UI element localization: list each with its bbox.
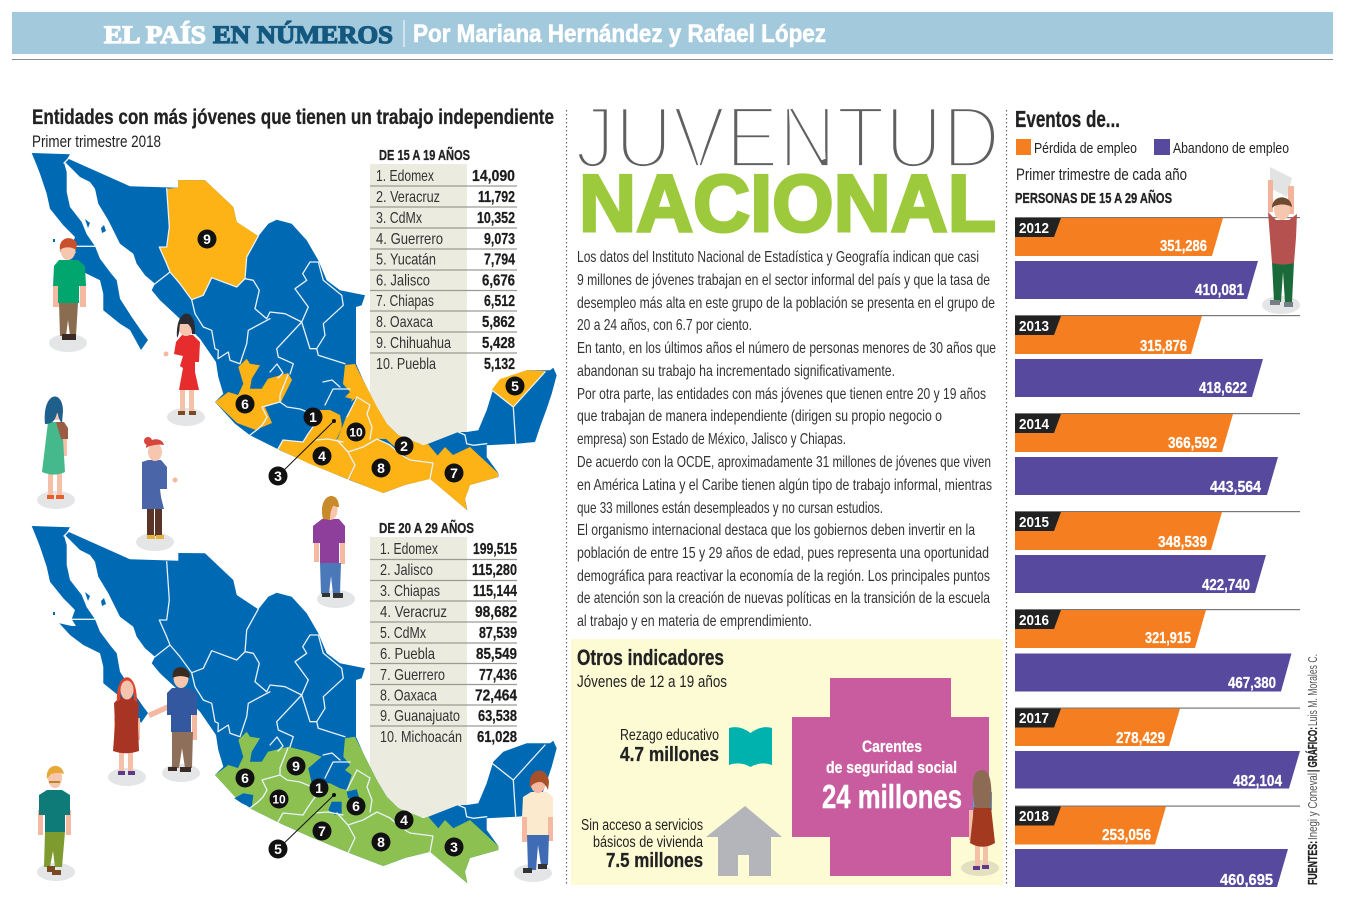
map rank badges: 5 <box>511 378 519 394</box>
table: de 20 a 29 años: 9. Guanajuato <box>380 708 460 725</box>
bars 2016: 321,915 <box>1145 630 1191 647</box>
map rank badges: 2 <box>400 438 408 454</box>
person: man blue shirt shaking hands <box>148 667 200 782</box>
panel heading: Otros indicadores <box>577 645 724 670</box>
map rank badges: 1 <box>309 409 317 425</box>
cross: carentes de seguridad social <box>792 678 989 876</box>
cross: carentes de seguridad social: de seguridad social <box>826 758 957 777</box>
bars 2014: 366,592 <box>1168 435 1217 452</box>
table: de 15 a 19 años: 9. Chihuahua <box>376 335 451 352</box>
table: de 15 a 19 años: 8. Oaxaca <box>376 314 433 331</box>
bars 2016: 467,380 <box>1228 675 1276 692</box>
table: de 20 a 29 años: 10. Michoacán <box>380 729 462 746</box>
table: de 20 a 29 años: 115,280 <box>472 562 517 579</box>
body text: desempleo más alta en este grupo de la población se presenta en el grupo de <box>577 295 995 312</box>
map rank badges: 8 <box>377 834 385 850</box>
byline: Por Mariana Hernández y Rafael López <box>413 20 826 48</box>
credits: | GRÁFICO: <box>1305 727 1320 772</box>
cross: carentes de seguridad social: 24 millones <box>822 778 962 815</box>
person: man purple shirt <box>313 496 355 608</box>
map rank badges: 4 <box>318 448 326 464</box>
map rank badges: 6 <box>241 396 249 412</box>
map: 20 a 29 años <box>32 526 557 883</box>
table: de 20 a 29 años: DE 20 A 29 AÑOS <box>379 519 474 537</box>
table: de 15 a 19 años: 10,352 <box>477 210 515 227</box>
table: de 15 a 19 años: 10. Puebla <box>376 356 436 373</box>
bars 2015: 348,539 <box>1158 534 1207 551</box>
table: de 15 a 19 años: 6,676 <box>482 272 515 290</box>
legend: Abandono de empleo <box>1173 140 1289 157</box>
bars 2017: 2017 <box>1019 710 1049 727</box>
table: de 20 a 29 años: 199,515 <box>473 541 517 558</box>
table: de 15 a 19 años: DE 15 A 19 AÑOS <box>379 146 470 164</box>
person: man cream shirt <box>514 771 553 882</box>
icon: house <box>706 806 782 876</box>
bars 2014: 443,564 <box>1210 479 1261 496</box>
map rank badges: 5 <box>274 841 282 857</box>
bars 2018: 253,056 <box>1102 827 1151 844</box>
bars 2018: 460,695 <box>1220 872 1273 889</box>
table: de 15 a 19 años <box>370 146 517 373</box>
map rank badges: 9 <box>292 758 300 774</box>
table: de 20 a 29 años: 7. Guerrero <box>380 667 445 684</box>
body text: que 33 millones están desempleados y no cursan estudios. <box>577 500 883 517</box>
body text: Los datos del Instituto Nacional de Estadística y Geografía indican que casi <box>577 249 979 266</box>
body text: en América Latina y el Caribe tienen algún tipo de trabajo informal, mientras <box>577 477 992 494</box>
heading: eventos de: Eventos de... <box>1015 106 1120 132</box>
body text: al trabajo y en materia de emprendimiento. <box>577 613 812 630</box>
indicator: vivienda: 7.5 millones <box>606 850 703 872</box>
person: man holding paper <box>1262 167 1300 314</box>
title: nacional: NACIONAL <box>579 159 996 249</box>
title: juventud: JUVENTUD <box>575 88 1000 186</box>
table: de 20 a 29 años: 8. Oaxaca <box>380 688 437 704</box>
bars 2012 <box>1015 217 1300 299</box>
table: de 20 a 29 años: 61,028 <box>477 729 517 746</box>
indicator: vivienda: básicos de vivienda <box>593 834 703 851</box>
body text: empresa) son Estado de México, Jalisco y Chiapas. <box>577 431 846 448</box>
table: de 20 a 29 años: 63,538 <box>478 708 517 725</box>
table: de 15 a 19 años: 2. Veracruz <box>376 189 440 206</box>
table: de 15 a 19 años: 6,512 <box>484 293 515 310</box>
bars 2016: 2016 <box>1019 612 1049 629</box>
table: de 20 a 29 años: 85,549 <box>476 646 517 663</box>
table: de 20 a 29 años: 2. Jalisco <box>380 562 433 579</box>
body text: En tanto, en los últimos años el número de personas menores de 30 años que <box>577 340 996 357</box>
body text: de atención son la creación de nuevas políticas en la transición de la escuela <box>577 590 990 607</box>
table: de 15 a 19 años: 5,862 <box>482 314 515 331</box>
table: de 20 a 29 años: 1. Edomex <box>380 541 438 558</box>
map rank badges: 6 <box>241 770 249 786</box>
map rank badges: 7 <box>318 823 326 839</box>
table: de 20 a 29 años: 4. Veracruz <box>380 604 447 621</box>
body text <box>577 249 996 630</box>
indicator: rezago educativo: 4.7 millones <box>620 744 719 766</box>
bars 2012: 351,286 <box>1160 238 1207 255</box>
body text: El organismo internacional destaca que los gobiernos deben invertir en la <box>577 522 975 539</box>
legend: Pérdida de empleo <box>1034 140 1137 157</box>
bars 2012: 2012 <box>1019 220 1049 237</box>
bars 2017: 482,104 <box>1233 773 1282 790</box>
table: de 15 a 19 años: 6. Jalisco <box>376 272 430 290</box>
table: de 20 a 29 años: 5. CdMx <box>380 625 426 642</box>
map rank badges: 9 <box>203 231 211 247</box>
table: de 20 a 29 años: 87,539 <box>479 625 517 642</box>
section name: EL PAÍS <box>104 21 206 49</box>
indicator: rezago educativo <box>620 727 719 766</box>
bars 2014: 2014 <box>1019 416 1050 433</box>
credits: Inegi y Coneval <box>1306 773 1320 840</box>
map rank badges: 4 <box>400 812 408 828</box>
person: woman red dress <box>164 313 205 426</box>
indicator: rezago educativo: Rezago educativo <box>620 727 719 744</box>
table: de 15 a 19 años: 11,792 <box>478 189 515 206</box>
bars 2015 <box>1015 511 1300 594</box>
map rank badges <box>236 756 464 858</box>
table background 15 a 19 <box>370 164 467 444</box>
map rank badges <box>198 230 524 486</box>
map rank badges: 3 <box>274 468 282 484</box>
table: de 20 a 29 años: 3. Chiapas <box>380 583 440 600</box>
map rank badges: 10 <box>349 426 363 440</box>
bars 2015: 2015 <box>1019 514 1049 531</box>
table: de 20 a 29 años: 6. Puebla <box>380 646 435 663</box>
CdMx leader line <box>278 421 334 476</box>
map rank badges: 1 <box>315 780 323 796</box>
body text: Por otra parte, las entidades con más jóvenes que tienen entre 20 y 19 años <box>577 386 986 403</box>
body text: abandonan su trabajo ha incrementado significativamente. <box>577 363 895 380</box>
table: de 20 a 29 años: 115,144 <box>473 583 517 600</box>
credits <box>1305 654 1320 885</box>
table background 20 a 29 <box>370 537 467 817</box>
bars 2015: 422,740 <box>1202 577 1250 594</box>
bars 2013: 315,876 <box>1140 338 1187 355</box>
table: de 15 a 19 años: 7,794 <box>484 252 515 268</box>
icon: book <box>729 727 772 767</box>
bars 2014 <box>1015 413 1300 496</box>
body text: demográfica para reactivar la economía de la región. Los principales puntos <box>577 568 990 585</box>
table: de 15 a 19 años: 9,073 <box>484 231 515 248</box>
map rank badges: 7 <box>450 465 458 481</box>
CdMx leader line <box>278 795 334 849</box>
table: de 15 a 19 años: 14,090 <box>472 168 515 185</box>
subheading: trimestre: Primer trimestre 2018 <box>32 132 161 151</box>
cross: carentes de seguridad social: Carentes <box>862 737 922 756</box>
map: 15 a 19 años <box>32 153 557 510</box>
table: de 20 a 29 años: 77,436 <box>479 667 517 684</box>
table: de 15 a 19 años: 5,428 <box>482 335 515 352</box>
table: de 15 a 19 años: 4. Guerrero <box>376 231 443 248</box>
panel: otros indicadores <box>571 639 1003 885</box>
map rank badges: 10 <box>272 792 286 806</box>
table: de 15 a 19 años: 7. Chiapas <box>376 293 434 310</box>
panel subheading: Jóvenes de 12 a 19 años <box>577 672 727 691</box>
table: de 15 a 19 años: 5,132 <box>484 356 515 373</box>
map rank badges: 8 <box>377 460 385 476</box>
header band <box>12 12 1333 60</box>
section name: EN NÚMEROS <box>213 21 393 49</box>
person: woman green dress <box>37 396 75 509</box>
person: man green shirt <box>49 238 87 352</box>
body text: 20 a 24 años, con 6.7 por ciento. <box>577 317 752 334</box>
table: de 20 a 29 años <box>370 519 517 746</box>
body text: De acuerdo con la OCDE, aproximadamente 31 millones de jóvenes que viven <box>577 454 991 471</box>
table: de 15 a 19 años: 3. CdMx <box>376 210 422 227</box>
person: woman blue dress <box>136 437 178 551</box>
body text: 9 millones de jóvenes trabajan en el sector informal del país y que la tasa de <box>577 272 990 289</box>
body text: población de entre 15 y 29 años de edad, pues representa una oportunidad <box>577 545 989 562</box>
table: de 20 a 29 años: 72,464 <box>475 688 517 704</box>
bars 2013: 2013 <box>1019 318 1049 335</box>
bars 2016 <box>1015 609 1300 692</box>
table: de 15 a 19 años: 1. Edomex <box>376 168 434 185</box>
bars 2012: 410,081 <box>1195 282 1244 299</box>
subheading: primer trimestre: Primer trimestre de cada año <box>1016 165 1187 184</box>
bars 2013: 418,622 <box>1199 380 1247 397</box>
bars 2017: 278,429 <box>1116 730 1165 747</box>
table: de 20 a 29 años: 98,682 <box>475 604 517 621</box>
subheading: personas: PERSONAS DE 15 A 29 AÑOS <box>1015 189 1172 207</box>
bars 2018 <box>1015 806 1300 889</box>
credits: Luis M. Morales C. <box>1306 654 1320 726</box>
map rank badges: 3 <box>450 839 458 855</box>
map rank badges: 6 <box>352 798 360 814</box>
section name <box>104 21 393 49</box>
person: woman red hair <box>108 677 146 786</box>
person: girl <box>961 770 999 876</box>
indicator: vivienda <box>581 817 703 872</box>
person: man with mustache <box>37 766 75 881</box>
body text: que trabajan de manera independiente (dirigen su propio negocio o <box>577 408 942 425</box>
indicator: vivienda: Sin acceso a servicios <box>581 817 703 834</box>
credits: FUENTES: <box>1306 841 1320 885</box>
heading: entidades: Entidades con más jóvenes que tienen un trabajo independiente <box>32 105 554 129</box>
bars 2018: 2018 <box>1019 808 1049 825</box>
bars 2013 <box>1015 315 1300 397</box>
legend <box>1016 139 1289 157</box>
table: de 15 a 19 años: 5. Yucatán <box>376 252 436 268</box>
bars 2017 <box>1015 708 1300 790</box>
